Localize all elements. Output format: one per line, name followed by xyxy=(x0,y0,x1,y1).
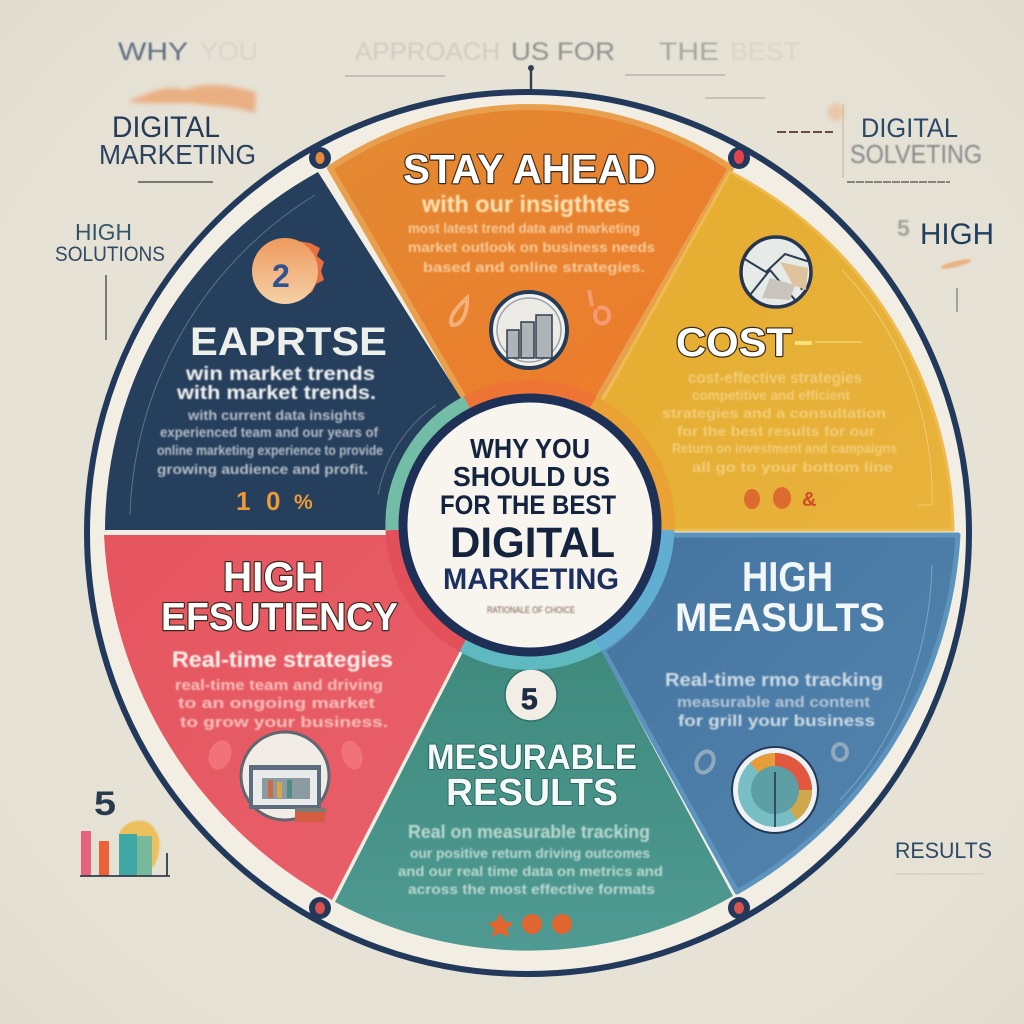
heading: measurable results: MESURABLE xyxy=(427,738,637,777)
icon: number 2 badge: 2 xyxy=(272,258,290,294)
bottom-left mini bar chart xyxy=(80,785,170,876)
centre circle xyxy=(403,398,657,652)
heading: high efficiency: EFSUTIENCY xyxy=(161,596,398,639)
small orange icons xyxy=(744,487,816,511)
heading: measurable results: RESULTS xyxy=(446,772,618,814)
ring junction dots xyxy=(309,147,750,919)
faded top title: THE xyxy=(659,38,719,66)
body text: cost: Return on investment and campaigns xyxy=(672,440,897,456)
panel: stay ahead xyxy=(330,107,731,402)
panel: high results xyxy=(603,535,958,892)
bottom-left mini bar chart: 5 xyxy=(94,785,116,823)
right label: high xyxy=(897,215,994,312)
icon: cost badge xyxy=(741,237,811,307)
centre title: MARKETING xyxy=(443,563,619,596)
panel: measurable results xyxy=(335,650,733,951)
subheading: expertise: with market trends. xyxy=(176,383,376,404)
left label: high solutions xyxy=(55,219,165,340)
icon: pie gauge badge xyxy=(732,747,818,833)
icon: number 2 badge xyxy=(252,238,324,304)
body text: cost: all go to your bottom line xyxy=(692,459,893,475)
body text: expertise: experienced team and our years of xyxy=(160,424,378,440)
body text: high efficiency: to an ongoing market xyxy=(178,695,375,712)
body text: expertise xyxy=(157,407,383,477)
heading: high efficiency xyxy=(161,553,398,639)
right label: high: HIGH xyxy=(920,218,994,251)
heading dash xyxy=(795,341,812,345)
subheading: expertise: win market trends xyxy=(185,364,375,385)
heading: expertise: EAPRTSE xyxy=(190,320,387,364)
body text: high results xyxy=(665,670,883,730)
panel: expertise xyxy=(105,172,464,530)
left label: high solutions: SOLUTIONS xyxy=(55,243,165,266)
panel: high efficiency xyxy=(104,535,462,900)
stat: 10%: 0 xyxy=(266,486,280,516)
heading: high efficiency: HIGH xyxy=(223,553,324,600)
body text: measurable results: across the most effective formats xyxy=(408,881,655,897)
heading: measurable results xyxy=(427,738,637,814)
body text: high results: Real-time rmo tracking xyxy=(665,670,883,690)
top title underlines and pin xyxy=(345,65,765,104)
top-right label: digital solveting: DIGITAL xyxy=(861,113,958,143)
body text: cost: for the best results for our xyxy=(677,423,876,439)
small orange icons: & xyxy=(802,489,816,511)
top-left label: digital marketing: DIGITAL xyxy=(112,111,220,144)
bottom-right label: results xyxy=(895,838,992,874)
faded top title xyxy=(118,38,800,66)
heading: high results: MEASULTS xyxy=(675,596,885,640)
heading: stay ahead: STAY AHEAD xyxy=(403,146,656,192)
stat: 10%: % xyxy=(294,491,313,514)
faded top title: US FOR xyxy=(511,38,615,66)
body text: measurable results: and our real time data on metrics and xyxy=(398,863,663,879)
subheading: high efficiency: Real-time strategies xyxy=(172,647,393,672)
bottom-right label: results: RESULTS xyxy=(895,838,992,863)
inner coloured ring xyxy=(393,388,667,663)
body text: cost: strategies and a consultation xyxy=(662,405,886,421)
right label: high: 5 xyxy=(897,215,910,241)
faded top title: WHY xyxy=(118,38,188,66)
faded top title: BEST xyxy=(730,38,800,66)
body text: cost: cost-effective strategies xyxy=(688,370,862,387)
badge: number 5 xyxy=(505,669,557,721)
body text: cost: competitive and efficient xyxy=(692,387,850,403)
body text: expertise: with current data insights xyxy=(187,407,365,423)
subheading: stay ahead: with our insigthtes xyxy=(421,191,630,217)
badge: number 5: 5 xyxy=(521,683,538,716)
left label: high solutions: HIGH xyxy=(75,219,132,245)
body text: high results: measurable and content xyxy=(677,694,870,711)
body text: high efficiency: real-time team and driving xyxy=(175,677,383,694)
heading: high results: HIGH xyxy=(742,553,833,600)
body text: stay ahead: most latest trend data and marketing xyxy=(408,220,640,236)
body text: high efficiency xyxy=(175,677,388,731)
small decorative marks xyxy=(205,737,367,773)
body text: expertise: growing audience and profit. xyxy=(157,461,368,477)
top-right label: digital solveting xyxy=(777,103,982,182)
body text: high results: for grill your business xyxy=(678,713,875,730)
faded top title: YOU xyxy=(200,38,258,66)
wheel outer ring xyxy=(87,92,969,974)
top-left label: digital marketing: MARKETING xyxy=(99,139,256,170)
small decorative marks xyxy=(693,744,847,775)
centre title xyxy=(440,433,619,596)
body text: measurable results xyxy=(398,822,663,897)
centre title: FOR THE BEST xyxy=(440,490,616,520)
panel: cost xyxy=(600,172,953,530)
small orange icons xyxy=(488,913,572,937)
body text: high efficiency: to grow your business. xyxy=(180,714,388,731)
body text: expertise: online marketing experience to provide xyxy=(157,442,383,458)
body text: stay ahead: market outlook on business needs xyxy=(408,239,655,255)
stat: 10% xyxy=(236,486,313,516)
centre caption: RATIONALE OF CHOICE xyxy=(487,605,575,615)
top-right label: digital solveting: SOLVETING xyxy=(850,139,982,169)
centre title: WHY YOU xyxy=(470,433,590,464)
stat: 10%: 1 xyxy=(236,486,250,516)
body text: stay ahead: based and online strategies. xyxy=(423,259,645,275)
subheading: expertise xyxy=(176,364,376,404)
body text: measurable results: our positive return driving outcomes xyxy=(410,845,650,861)
icon: monitor badge xyxy=(241,732,329,822)
centre title: DIGITAL xyxy=(450,519,615,567)
heading: cost: COST xyxy=(676,321,792,365)
heading: high results xyxy=(675,553,885,640)
top-left label: digital marketing xyxy=(99,85,256,182)
small decorative marks xyxy=(451,290,609,325)
body text: measurable results: Real on measurable tracking xyxy=(408,822,650,842)
centre title: SHOULD US xyxy=(453,461,610,492)
faded top title: APPROACH xyxy=(355,38,500,66)
icon: bar chart badge xyxy=(491,292,567,368)
body text: cost xyxy=(662,370,897,475)
body text: stay ahead xyxy=(408,220,655,275)
